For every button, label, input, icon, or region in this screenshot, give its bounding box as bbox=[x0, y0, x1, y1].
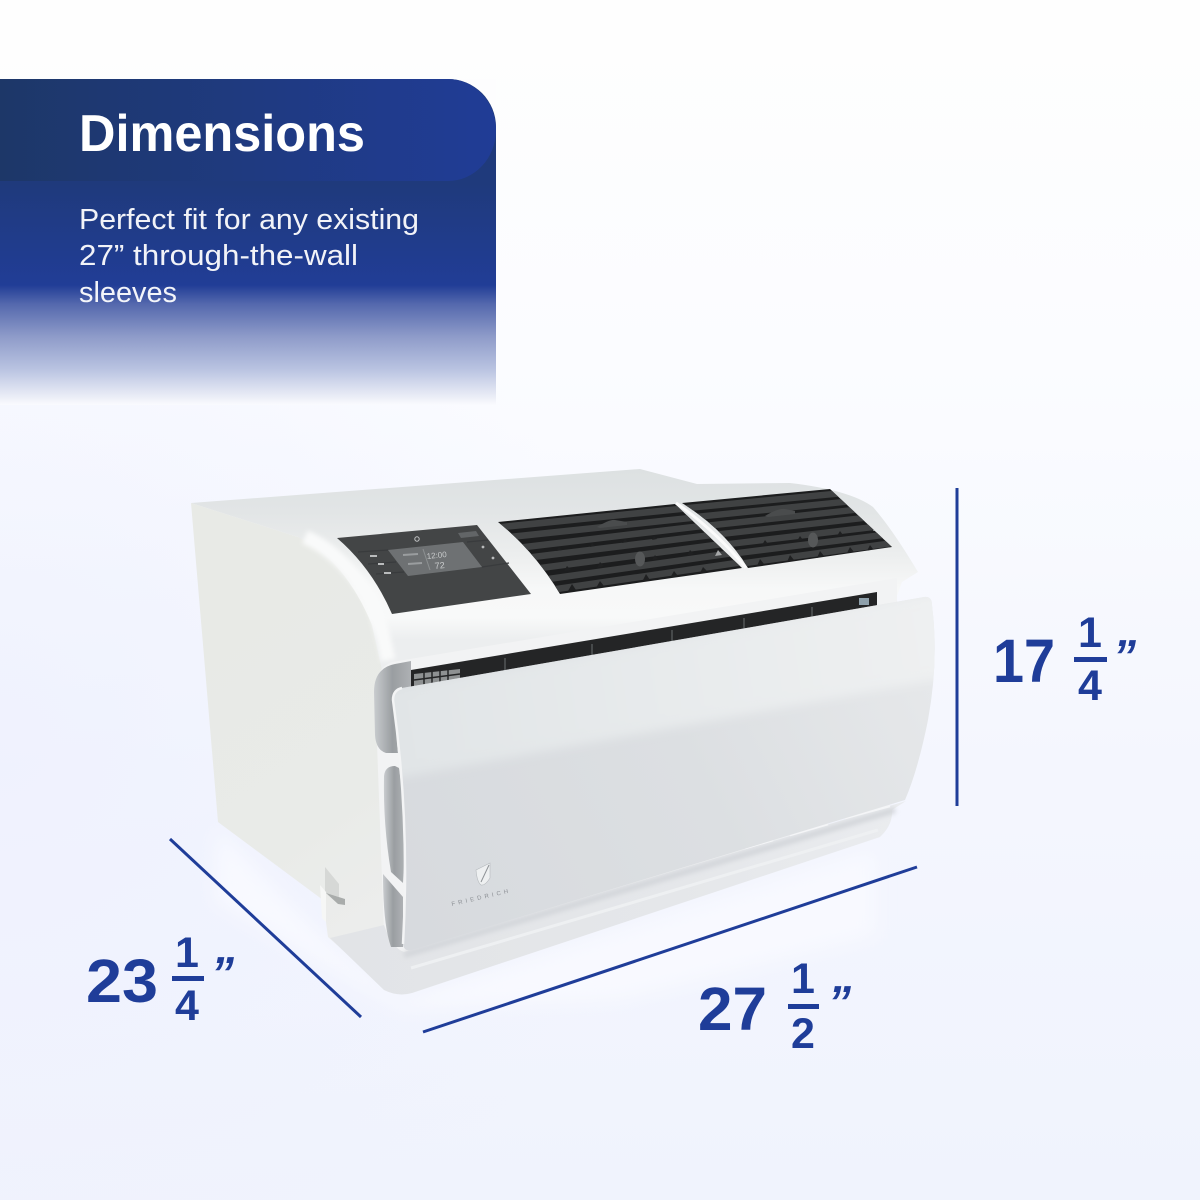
display screen bbox=[388, 542, 482, 576]
label: width 27 1/2: 27 bbox=[698, 975, 767, 1043]
front door panel bbox=[380, 590, 950, 950]
description text: sleeves bbox=[79, 277, 177, 309]
display screen: 72 bbox=[434, 560, 445, 571]
air slot strip bbox=[411, 592, 877, 690]
side face bbox=[191, 503, 392, 990]
description text bbox=[79, 204, 419, 309]
header band bbox=[0, 79, 496, 181]
logo bbox=[451, 863, 509, 908]
label: width 27 1/2 bbox=[698, 955, 851, 1058]
vent divider bbox=[676, 503, 746, 568]
logo: FRIEDRICH bbox=[451, 889, 509, 908]
display screen: 12:00 bbox=[426, 550, 448, 561]
label: width 27 1/2: ” bbox=[828, 976, 851, 1028]
control panel bbox=[337, 525, 531, 614]
air conditioner unit bbox=[191, 469, 950, 1010]
label: depth 23 1/4 bbox=[86, 929, 234, 1030]
dimension line: depth bbox=[170, 839, 361, 1017]
heading: Dimensions bbox=[79, 105, 365, 163]
label: height 17 1/4: 17 bbox=[993, 627, 1055, 695]
label: height 17 1/4: 4 bbox=[1078, 662, 1102, 710]
label: depth 23 1/4: ” bbox=[211, 947, 234, 999]
vent: left bbox=[498, 504, 742, 594]
panel: dimensions header bbox=[0, 79, 496, 405]
lower front frame bbox=[375, 578, 900, 960]
label: height 17 1/4: ” bbox=[1113, 630, 1136, 682]
dimension line: width bbox=[423, 867, 917, 1032]
highlight arc between side and shell bbox=[305, 537, 388, 660]
recess: middle bbox=[384, 766, 404, 883]
recess: upper bbox=[374, 661, 411, 753]
label: depth 23 1/4: 1 bbox=[175, 929, 199, 977]
dimension line: height bbox=[956, 488, 958, 806]
label: depth 23 1/4: 4 bbox=[175, 982, 199, 1030]
vent: right bbox=[682, 489, 892, 568]
label: height 17 1/4 bbox=[993, 609, 1136, 710]
label: width 27 1/2: 2 bbox=[791, 1010, 815, 1058]
top face and upper shell bbox=[191, 469, 918, 700]
side bracket bbox=[320, 867, 345, 922]
recess: lower bbox=[383, 874, 403, 947]
buttons bbox=[370, 537, 494, 574]
base lip bbox=[330, 801, 906, 994]
label: width 27 1/2: 1 bbox=[791, 955, 815, 1003]
label: depth 23 1/4: 23 bbox=[86, 947, 158, 1015]
description text: Perfect fit for any existing bbox=[79, 204, 419, 236]
description text: 27” through-the-wall bbox=[79, 240, 358, 272]
label: height 17 1/4: 1 bbox=[1078, 609, 1102, 657]
